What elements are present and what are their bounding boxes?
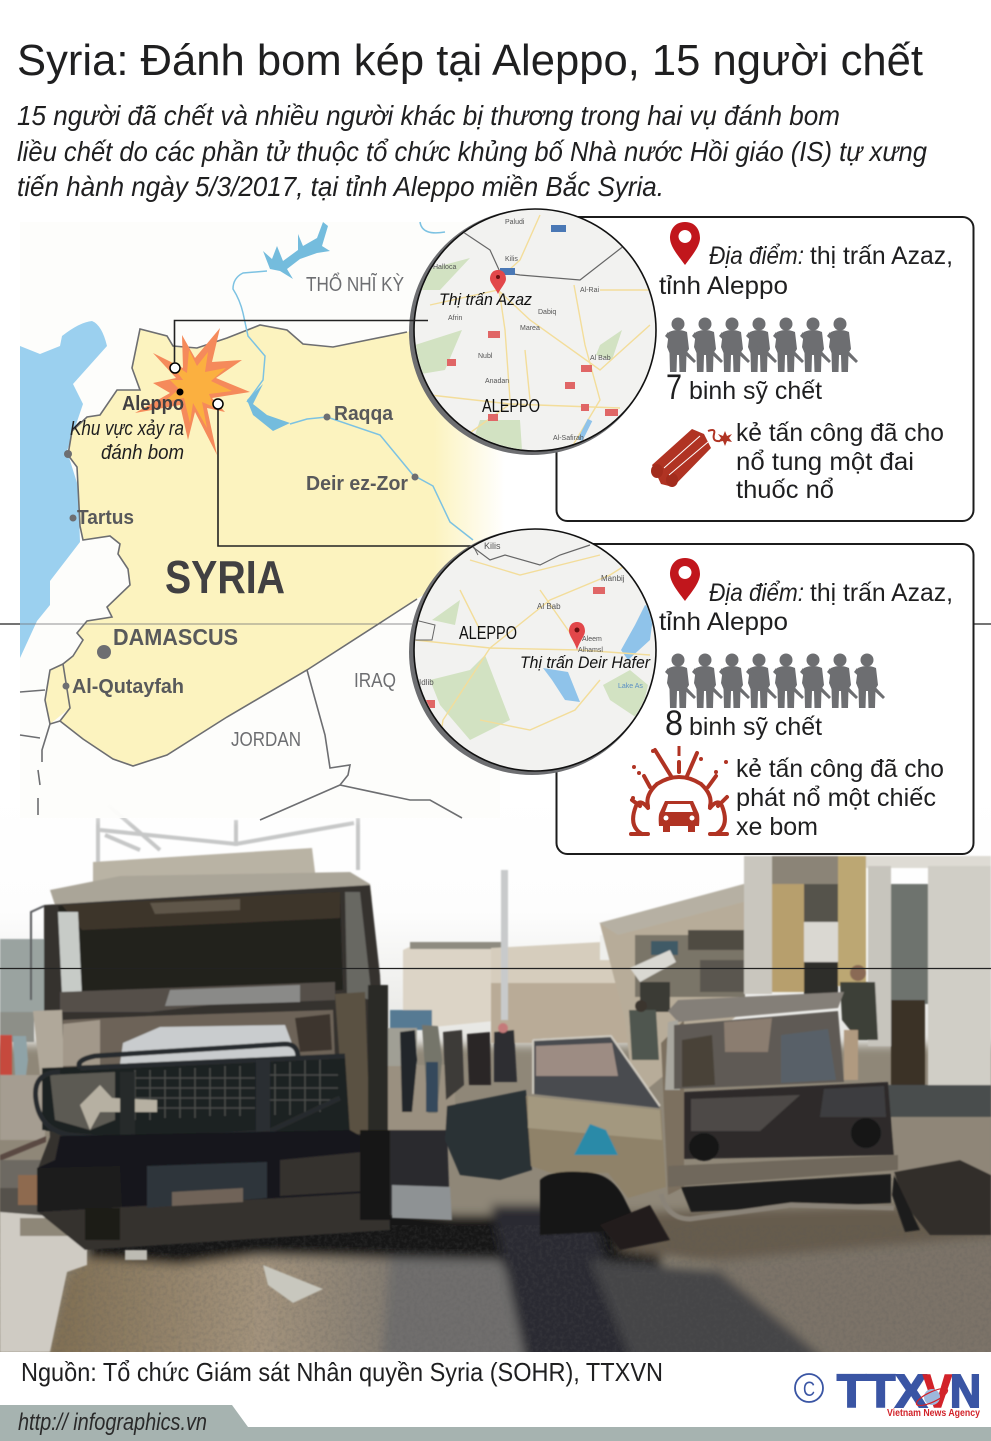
- source text: Nguồn: Tổ chức Giám sát Nhân quyền Syria (SOHR), TTXVN: [21, 1357, 663, 1387]
- casualties text: binh sỹ chết: [689, 713, 822, 741]
- country and city labels: Raqqa: [334, 403, 394, 425]
- location text: Địa điểm:: [709, 242, 804, 270]
- attack text: kẻ tấn công đã cho: [736, 419, 944, 447]
- icon: location pin: [670, 222, 700, 265]
- casualties text: 7: [666, 368, 682, 407]
- country and city labels: Aleppo: [122, 393, 184, 415]
- right ground: [888, 1085, 991, 1117]
- location text: thị trấn Azaz,: [810, 242, 953, 270]
- right buildings: [600, 902, 745, 1088]
- map pin: [490, 270, 506, 294]
- website: http:// infographics.vn: [18, 1409, 207, 1436]
- location text: thị trấn Azaz,: [810, 579, 953, 607]
- logo: TTXVN: C: [803, 1378, 815, 1401]
- logo: TTXVN: [795, 1365, 981, 1419]
- circle map: Azaz: Marea: [520, 325, 540, 332]
- circle map: Azaz: ALEPPO: [482, 396, 540, 416]
- logo: TTXVN: TTX: [837, 1365, 927, 1417]
- circle map: Azaz: Al-Rai: [580, 287, 600, 294]
- icon: 8 soldiers: [665, 654, 885, 708]
- footer bar: [0, 1405, 991, 1441]
- icon: location pin: [670, 558, 700, 601]
- panel: Deir Hafer: [556, 544, 974, 854]
- intro text: [17, 100, 927, 202]
- van side: [533, 1036, 660, 1108]
- casualties text: binh sỹ chết: [689, 377, 822, 405]
- circle map: Azaz: Halloca: [433, 264, 456, 271]
- circle map: Azaz: Dabiq: [538, 309, 556, 316]
- explosion: [135, 328, 250, 455]
- truck bumper: [38, 1130, 360, 1208]
- location text: tỉnh Aleppo: [659, 272, 788, 300]
- lake and rivers: [263, 222, 330, 279]
- location text: tỉnh Aleppo: [659, 608, 788, 636]
- map pin: [569, 622, 585, 650]
- leader dots: [170, 363, 223, 409]
- casualties text: 8: [665, 704, 683, 743]
- intro text: tiến hành ngày 5/3/2017, tại tỉnh Aleppo miền Bắc Syria.: [17, 171, 664, 202]
- map: [20, 222, 505, 820]
- city dots: [62, 414, 418, 690]
- circle map: Azaz: [174, 209, 656, 455]
- location text: Địa điểm:: [709, 579, 804, 607]
- icon: dynamite: [651, 429, 732, 487]
- country and city labels: đánh bom: [101, 442, 184, 464]
- attack text: nổ tung một đai: [736, 448, 914, 476]
- truck cab: [93, 848, 316, 884]
- country and city labels: JORDAN: [231, 729, 301, 751]
- left background: [0, 939, 44, 1014]
- circle map: Deir Hafer: Thị trấn Deir Hafer: [520, 653, 651, 672]
- intro text: liều chết do các phần tử thuộc tổ chức khủng bố Nhà nước Hồi giáo (IS) tự xưng: [17, 136, 927, 167]
- people right: [629, 1010, 659, 1060]
- country and city labels: Al-Qutayfah: [72, 676, 184, 698]
- panel: Azaz: [556, 217, 974, 521]
- circle map: Azaz: Afrin: [448, 315, 462, 322]
- van cab: [661, 1020, 684, 1195]
- logo: TTXVN: Vietnam News Agency: [887, 1408, 980, 1419]
- center building: [402, 946, 492, 1027]
- circle map: Deir Hafer: Kilis: [484, 541, 501, 551]
- casualties text: [665, 704, 822, 743]
- van left door: [445, 1090, 532, 1180]
- circle map: Azaz: Nubl: [478, 353, 493, 360]
- attack text: [736, 419, 944, 504]
- circle map: Azaz: Kilis: [505, 256, 518, 263]
- logo: TTXVN: N: [950, 1365, 981, 1417]
- circle map: Deir Hafer: Alhamsl: [578, 647, 603, 654]
- attack text: phát nổ một chiếc: [736, 784, 936, 812]
- circle map: Deir Hafer: ALEPPO: [459, 623, 517, 643]
- circle map: Azaz: Thị trấn Azaz: [439, 290, 532, 309]
- truck frame: [95, 818, 361, 871]
- country and city labels: Khu vực xảy ra: [70, 418, 184, 440]
- country and city labels: IRAQ: [354, 670, 396, 692]
- country: Syria: [60, 300, 505, 766]
- country and city labels: SYRIA: [165, 551, 285, 603]
- location text: [659, 579, 953, 636]
- circle map: Deir Hafer: Al Bab: [537, 602, 561, 611]
- circle map: Azaz: Al-Safirah: [553, 435, 584, 442]
- circle map: Azaz: Al Bab: [590, 355, 611, 362]
- aleppo dot: [176, 388, 184, 396]
- leader line 2: [218, 409, 475, 546]
- circle map: Deir Hafer: Manbij: [601, 574, 625, 583]
- location text: [659, 242, 953, 300]
- country and city labels: Tartus: [77, 507, 134, 529]
- casualties text: [666, 368, 822, 407]
- title: Syria: Đánh bom kép tại Aleppo, 15 người chết: [17, 36, 923, 85]
- country and city labels: DAMASCUS: [113, 624, 238, 650]
- puddle: [0, 1212, 87, 1352]
- circle map: Deir Hafer: [409, 529, 656, 775]
- attack text: [736, 755, 944, 841]
- center ground: [385, 1065, 455, 1135]
- circle map: Azaz: Anadan: [485, 378, 509, 385]
- sea: [20, 321, 107, 658]
- circle map: Deir Hafer: Idlib: [419, 678, 434, 687]
- logo: TTXVN: V: [923, 1365, 952, 1417]
- photo: burned vehicles: [0, 790, 991, 1380]
- long horizontal lines: [0, 624, 991, 968]
- attack text: thuốc nổ: [736, 476, 834, 504]
- icon: 7 soldiers: [665, 318, 858, 372]
- circle map: Deir Hafer: Lake As: [618, 683, 643, 690]
- icon: car bomb: [631, 746, 728, 834]
- attack text: kẻ tấn công đã cho: [736, 755, 944, 783]
- distant vehicles and people: [390, 1010, 432, 1030]
- circle map: Azaz: Paludi: [505, 219, 525, 226]
- circle map: Deir Hafer: Aleem: [582, 636, 602, 643]
- country and city labels: THỔ NHĨ KỲ: [306, 272, 404, 296]
- intro text: 15 người đã chết và nhiều người khác bị thương trong hai vụ đánh bom: [17, 100, 840, 131]
- attack text: xe bom: [736, 813, 818, 841]
- leader line 1: [174, 320, 428, 363]
- country and city labels: Deir ez-Zor: [306, 473, 408, 495]
- country and city labels: [70, 272, 408, 751]
- truck grille: [40, 1058, 350, 1136]
